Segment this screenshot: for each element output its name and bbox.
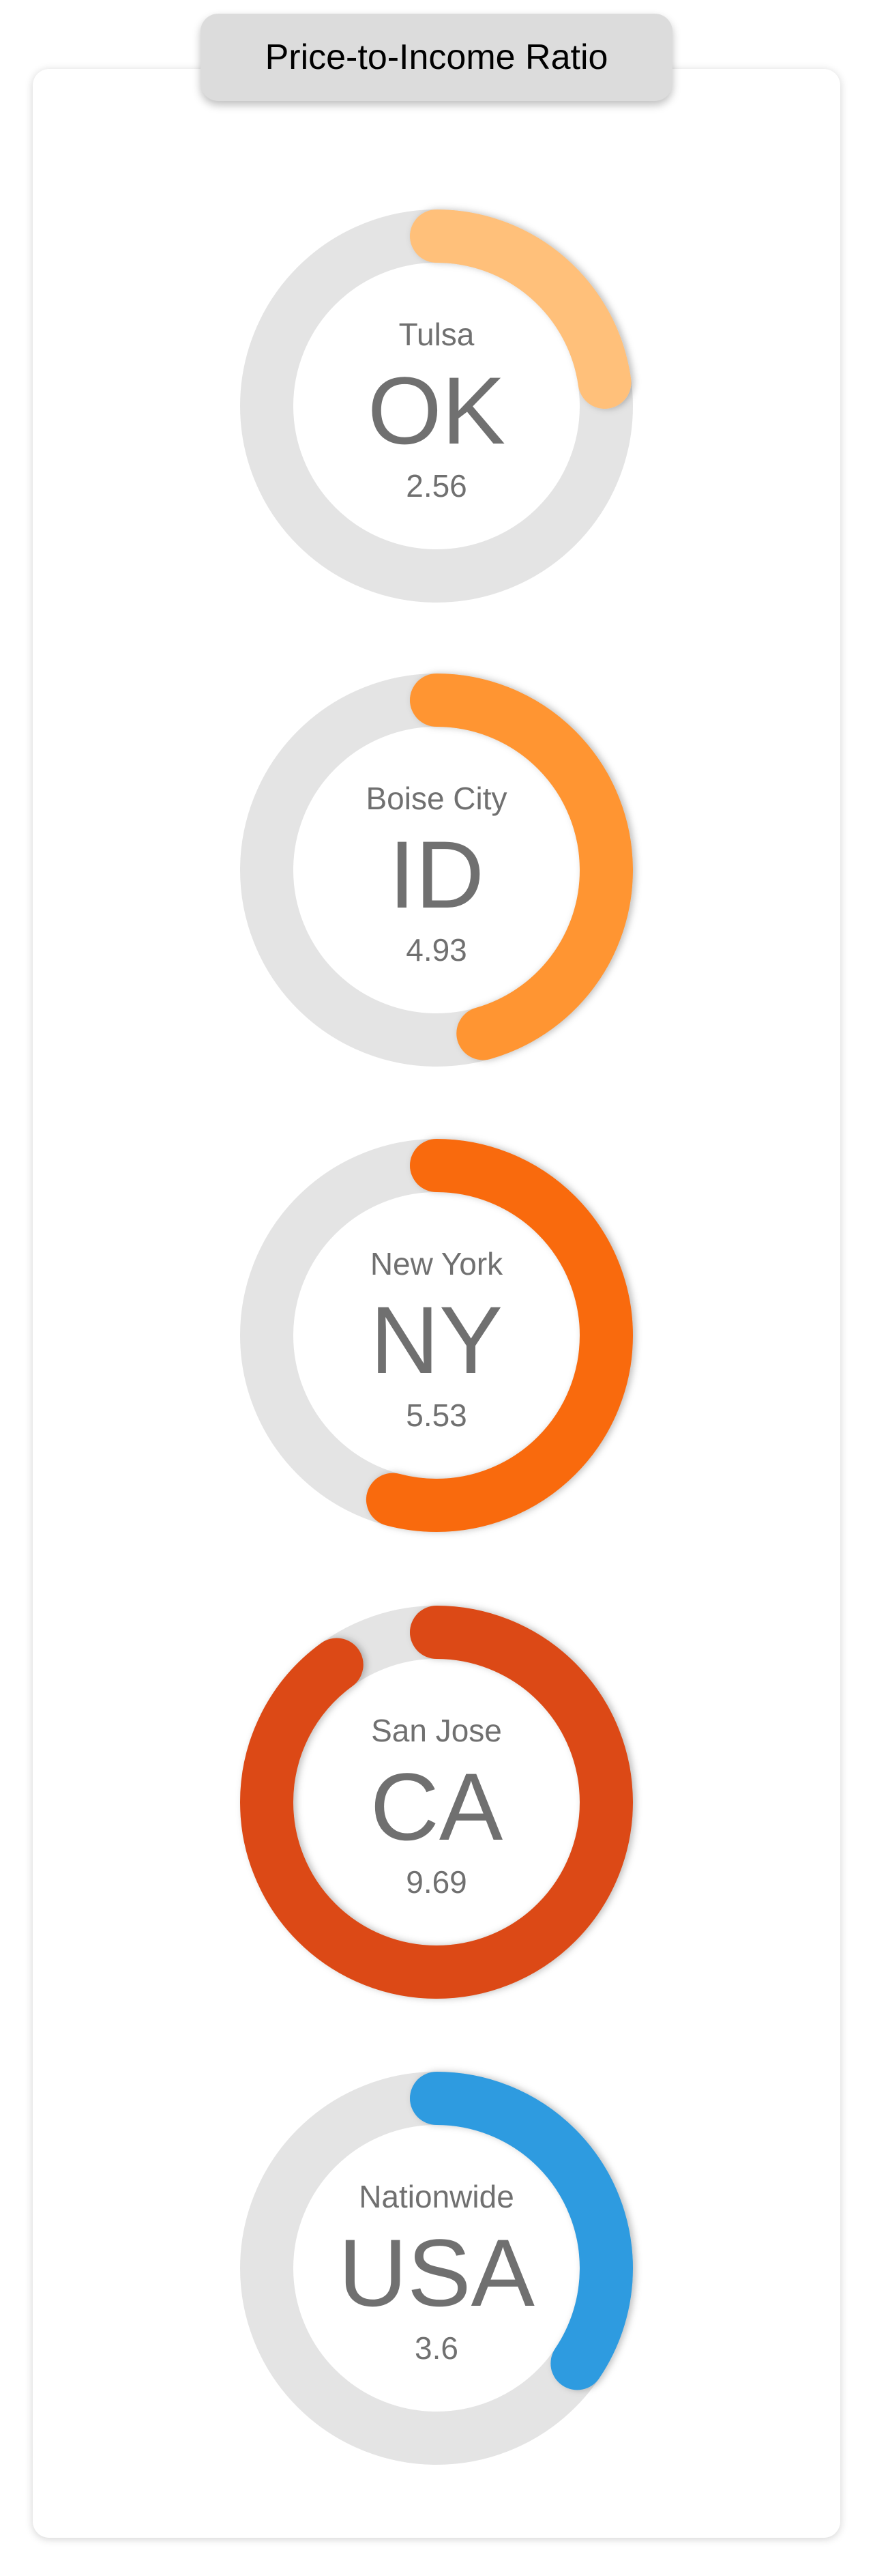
gauge: Tulsa OK: Tulsa	[399, 317, 475, 352]
gauge: Nationwide USA: 3.6	[415, 2330, 458, 2366]
title	[201, 14, 672, 101]
title: Price-to-Income Ratio	[265, 38, 608, 77]
gauge: Tulsa OK: 2.56	[406, 468, 467, 504]
gauge: Boise City ID	[267, 700, 606, 1040]
gauge: Tulsa OK	[267, 236, 606, 576]
gauge: San Jose CA: 9.69	[406, 1864, 467, 1900]
gauge: Boise City ID: Boise City	[366, 781, 507, 816]
gauge: San Jose CA: San Jose	[371, 1713, 502, 1748]
gauge: Tulsa OK: OK	[368, 357, 505, 464]
gauge: San Jose CA	[267, 1632, 606, 1972]
gauge: Nationwide USA: USA	[338, 2219, 535, 2326]
gauge: San Jose CA: CA	[370, 1753, 503, 1860]
gauge: Boise City ID: ID	[389, 821, 484, 928]
gauge: New York NY: New York	[370, 1246, 503, 1282]
gauge: Nationwide USA: Nationwide	[359, 2179, 514, 2214]
gauge: New York NY: NY	[370, 1286, 503, 1393]
gauge: Boise City ID: 4.93	[406, 932, 467, 968]
gauge: Nationwide USA	[267, 2098, 606, 2438]
gauge: New York NY	[267, 1166, 606, 1505]
gauge: New York NY: 5.53	[406, 1398, 467, 1433]
